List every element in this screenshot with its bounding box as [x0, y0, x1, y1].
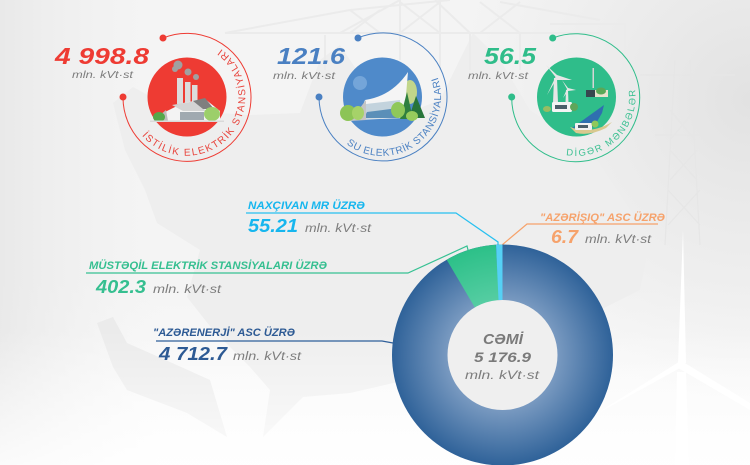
icon: hydro dam [340, 58, 425, 136]
panel: hydro power stations [273, 32, 448, 162]
panel: thermal power stations [54, 32, 252, 162]
map exclave [97, 317, 227, 437]
slice: Nakhchivan [496, 244, 502, 300]
value: Azerishiq: 6.7 [551, 227, 579, 247]
wind turbine background [600, 230, 750, 465]
unit: Azerenerji: mln. kVt·st [233, 351, 302, 363]
unit: Azerishiq: mln. kVt·st [585, 234, 652, 246]
total unit: mln. kVt·st [465, 370, 540, 382]
hydro ring [316, 33, 447, 161]
label: Nakhchivan: NAXÇIVAN MR ÜZRƏ [248, 199, 365, 212]
total label: CƏMİ [483, 331, 524, 348]
other sources unit: mln. kVt·st [468, 70, 529, 82]
value: independent stations: 402.3 [95, 277, 146, 297]
value: Nakhchivan: 55.21 [248, 216, 298, 236]
panel: other sources [468, 33, 640, 162]
thermal unit: mln. kVt·st [72, 69, 134, 81]
thermal ring label: İSTİLİK ELEKTRİK STANSİYALARI [142, 49, 246, 156]
leader line: independent stations [86, 246, 468, 273]
icon: renewable sources [537, 58, 616, 136]
label: independent stations: MÜSTƏQİL ELEKTRİK STANSİYALARI ÜZRƏ [89, 259, 327, 272]
value: Azerenerji: 4 712.7 [158, 344, 228, 364]
unit: Nakhchivan: mln. kVt·st [305, 223, 372, 235]
donut hole [448, 300, 558, 410]
unit: independent stations: mln. kVt·st [153, 284, 222, 296]
callout: Azerenerji [153, 326, 393, 364]
hydro value: 121.6 [277, 43, 345, 69]
other sources ring label: DİGƏR MƏNBƏLƏR [566, 90, 636, 156]
hydro unit: mln. kVt·st [273, 70, 336, 82]
thermal ring [120, 33, 251, 161]
slice: independent stations [447, 245, 499, 308]
total value: 5 176.9 [474, 349, 531, 365]
donut chart [392, 244, 613, 465]
icon: power plant [148, 58, 226, 136]
callout: independent power stations [86, 246, 468, 297]
label: Azerenerji: "AZƏRENERJİ" ASC ÜZRƏ [153, 326, 295, 339]
callout: Nakhchivan [246, 199, 498, 246]
label: Azerishiq: "AZƏRİŞIQ" ASC ÜZRƏ [540, 211, 665, 224]
other sources ring [509, 34, 640, 162]
leader line: Azerenerji [156, 341, 393, 343]
other sources value: 56.5 [484, 43, 537, 69]
leader line: Azerishiq [502, 224, 658, 245]
map silhouette [113, 33, 650, 437]
callout: Azerishiq [502, 211, 665, 247]
slice: Azerenerji [392, 244, 613, 465]
thermal value: 4 998.8 [54, 43, 149, 69]
hydro ring label: SU ELEKTRİK STANSİYALARI [348, 78, 442, 156]
leader line: Nakhchivan [246, 213, 498, 246]
